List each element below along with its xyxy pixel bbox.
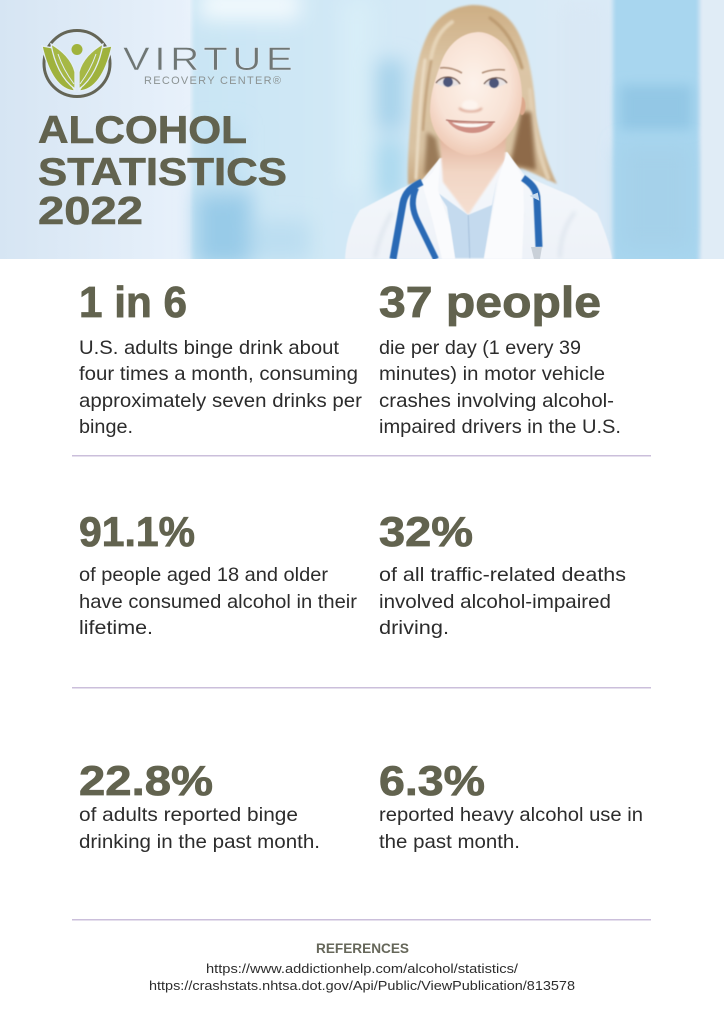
shirt shadow line [468,215,470,258]
hair strands [416,18,548,178]
stat: 91.1% [79,508,358,639]
stat: 6.3%: the past month. [379,831,520,853]
stat: 37 people: crashes involving alcohol- [379,390,614,412]
stethoscope highlight [532,194,538,199]
stat: 6.3%: reported heavy alcohol use in [379,804,643,826]
stat: 91.1%: of people aged 18 and older [79,564,329,586]
stat: 37 people: impaired drivers in the U.S. [379,416,621,438]
stat: 37 people: minutes) in motor vehicle [379,363,605,385]
stat: 32%: involved alcohol-impaired [379,591,611,613]
logo wordmark: VIRTUE [123,41,297,77]
logo figure head [72,44,82,55]
coat shading [375,212,575,258]
stat: 22.8% [79,757,320,853]
hair [408,5,557,185]
stat: 22.8%: drinking in the past month. [79,831,320,853]
stat: 22.8%: 22.8% [79,757,213,804]
logo ring [44,30,110,96]
stat: 91.1%: lifetime. [79,617,153,639]
face [430,32,522,155]
logo tagline: RECOVERY CENTER® [144,75,281,87]
stethoscope chest piece [531,247,542,259]
neck [440,138,506,215]
references: https://www.addictionhelp.com/alcohol/statistics/ [206,961,518,976]
stat: 32%: of all traffic-related deaths [379,564,626,586]
stat: 37 people: die per day (1 every 39 [379,337,581,359]
stat: 91.1%: 91.1% [79,508,195,555]
mouth [446,120,495,133]
stat: 6.3% [379,757,643,853]
shirt [438,178,497,258]
stat: 32% [379,508,626,639]
ear [518,97,526,115]
stat: 1 in 6 [79,278,363,438]
header photo background [0,0,724,265]
stat: 1 in 6: 1 in 6 [79,278,187,327]
stat: 37 people: 37 people [379,278,601,327]
title: STATISTICS [38,151,287,194]
title [38,109,287,233]
stethoscope [393,178,539,259]
references [149,941,575,993]
references: REFERENCES [316,941,409,956]
stat: 37 people [379,278,621,438]
stat: 1 in 6: U.S. adults binge drink about [79,337,340,359]
stat: 1 in 6: binge. [79,416,133,438]
title: 2022 [38,190,143,233]
logo leaves [42,44,112,91]
title: ALCOHOL [38,109,247,152]
stat: 1 in 6: four times a month, consuming [79,363,358,385]
nose [459,100,482,111]
hair shadow right [510,112,536,170]
stat: 32%: 32% [379,508,473,555]
stat: 6.3%: 6.3% [379,757,485,804]
stat: 91.1%: have consumed alcohol in their [79,591,358,613]
logo [42,30,297,96]
stat: 22.8%: of adults reported binge [79,804,298,826]
references: https://crashstats.nhtsa.dot.gov/Api/Public/ViewPublication/813578 [149,978,575,993]
page content background [0,259,724,1024]
eyes [436,68,507,88]
stat: 32%: driving. [379,617,449,639]
coat [345,152,612,259]
photo: smiling doctor [345,5,612,259]
stat: 1 in 6: approximately seven drinks per [79,390,363,412]
coat lapels [422,152,524,259]
hair shadow left [424,132,441,176]
